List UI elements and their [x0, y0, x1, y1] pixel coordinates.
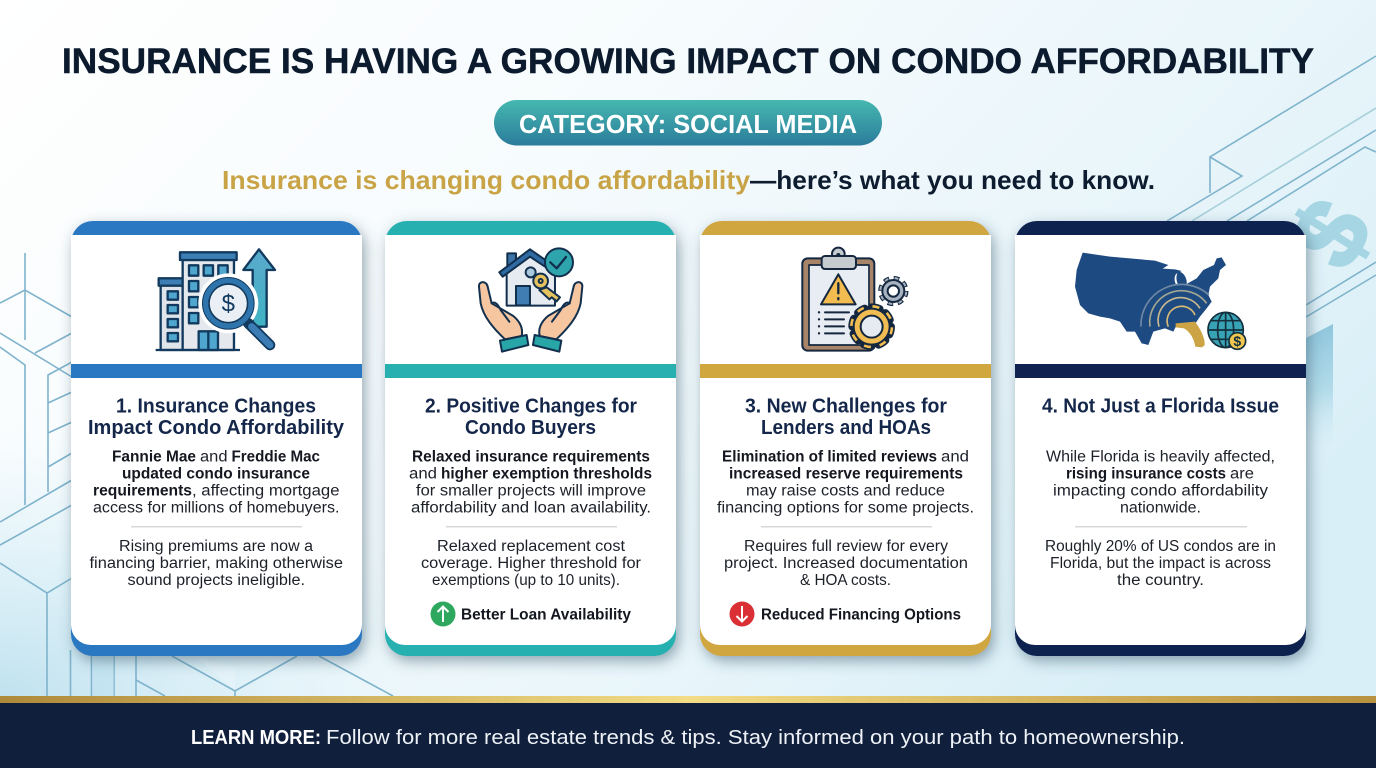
- heading: Impact Condo Affordability: [88, 417, 345, 439]
- text block: full review: Requires full review for every: [744, 538, 948, 555]
- heading: [745, 396, 947, 439]
- text block: premiums: [90, 538, 343, 589]
- text block: replacement cost: [421, 538, 641, 589]
- text block: relaxed requirements: for smaller projects will improve: [416, 483, 646, 500]
- text block: replacement cost: exemptions (up to 10 units).: [432, 572, 620, 589]
- text block: full review: & HOA costs.: [800, 572, 891, 589]
- heading: Condo Buyers: [465, 417, 596, 439]
- text block: premiums: sound projects ineligible.: [128, 572, 305, 589]
- text block: eliminated reviews: increased reserve requirements: [729, 466, 963, 483]
- text block: relaxed requirements: and: [409, 466, 437, 483]
- badge: better loan availability: Better Loan Availability: [461, 606, 631, 623]
- heading: 2. Positive Changes for: [425, 396, 637, 418]
- text block: requirements: Fannie Mae: [112, 449, 196, 466]
- badge: reduced financing options: Reduced Financing Options: [761, 606, 961, 623]
- text block: premiums: financing barrier, making otherwise: [90, 555, 343, 572]
- text block: replacement cost: Relaxed replacement cost: [437, 538, 626, 555]
- text block: rising costs: are: [1230, 466, 1254, 483]
- text block: requirements: and: [200, 449, 228, 466]
- category pill: CATEGORY: SOCIAL MEDIA: [519, 109, 857, 139]
- text block: full review: project. Increased documentation: [724, 555, 968, 572]
- footer banner: [0, 696, 1376, 768]
- text block: rising costs: impacting condo affordability: [1053, 483, 1268, 500]
- text block: eliminated reviews: financing options for some projects.: [717, 500, 974, 517]
- text block: requirements: , affecting mortgage: [192, 483, 340, 500]
- text block: eliminated reviews: [717, 449, 974, 517]
- text block: florida share: [1045, 538, 1276, 589]
- text block: rising costs: [1046, 449, 1275, 517]
- text block: full review: [724, 538, 968, 589]
- background line art: right building: [1167, 56, 1376, 447]
- footer banner: Follow for more real estate trends & tips. Stay informed on your path to homeownership.: [326, 727, 1185, 749]
- text block: replacement cost: coverage. Higher threshold for: [421, 555, 641, 572]
- text block: florida share: Roughly 20% of US condos are in: [1045, 538, 1276, 555]
- background line art: left building: [0, 253, 393, 696]
- panel: card 3 new challenges: [700, 221, 991, 656]
- subtitle: Insurance is changing condo affordability: [222, 165, 751, 195]
- subtitle: [222, 165, 1155, 195]
- heading: [425, 396, 637, 439]
- category pill: [494, 100, 882, 146]
- subtitle: —here’s what you need to know.: [750, 165, 1155, 195]
- icon: clipboard with warning and gears: [802, 248, 906, 351]
- text block: eliminated reviews: and: [941, 449, 969, 466]
- text block: relaxed requirements: Relaxed insurance requirements: [412, 449, 650, 466]
- text block: relaxed requirements: affordability and loan availability.: [411, 500, 651, 517]
- heading: 1. Insurance Changes: [116, 396, 316, 418]
- text block: florida share: the country.: [1117, 572, 1204, 589]
- text block: requirements: access for millions of homebuyers.: [93, 500, 340, 517]
- heading: Lenders and HOAs: [761, 417, 931, 439]
- heading: 3. New Challenges for: [745, 396, 947, 418]
- text block: rising costs: While Florida is heavily affected,: [1046, 449, 1275, 466]
- text block: rising costs: rising insurance costs: [1066, 466, 1226, 483]
- text block: eliminated reviews: Elimination of limited reviews: [722, 449, 937, 466]
- text block: relaxed requirements: higher exemption thresholds: [441, 466, 652, 483]
- text block: eliminated reviews: may raise costs and reduce: [746, 483, 945, 500]
- panel: card 4 not just florida: [1015, 221, 1306, 656]
- text block: relaxed requirements: [409, 449, 652, 517]
- text block: requirements: updated condo insurance: [122, 466, 310, 483]
- title: INSURANCE IS HAVING A GROWING IMPACT ON CONDO AFFORDABILITY: [62, 42, 1314, 81]
- icon: hands holding house and key: [479, 248, 582, 352]
- badge: reduced financing options: [730, 602, 961, 626]
- text block: requirements: Freddie Mac: [232, 449, 320, 466]
- icon: building with magnifier and arrow: $: [222, 291, 235, 318]
- icon: US map with Florida and globe: $: [1233, 333, 1241, 349]
- text block: rising costs: nationwide.: [1120, 500, 1201, 517]
- footer banner: LEARN MORE:: [191, 727, 321, 749]
- text block: florida share: Florida, but the impact is across: [1050, 555, 1271, 572]
- text block: premiums: Rising premiums are now a: [119, 538, 313, 555]
- badge: better loan availability: [430, 602, 631, 626]
- icon: US map with Florida and globe: [1075, 253, 1246, 349]
- panel: card 1 insurance changes: [71, 221, 362, 656]
- panel: card 2 positive changes: [385, 221, 676, 656]
- heading: [88, 396, 345, 439]
- text block: requirements: requirements: [93, 483, 192, 500]
- heading: 4. Not Just a Florida Issue: [1042, 396, 1279, 418]
- text block: requirements: [93, 449, 340, 517]
- icon: building with magnifier and arrow: [156, 249, 275, 350]
